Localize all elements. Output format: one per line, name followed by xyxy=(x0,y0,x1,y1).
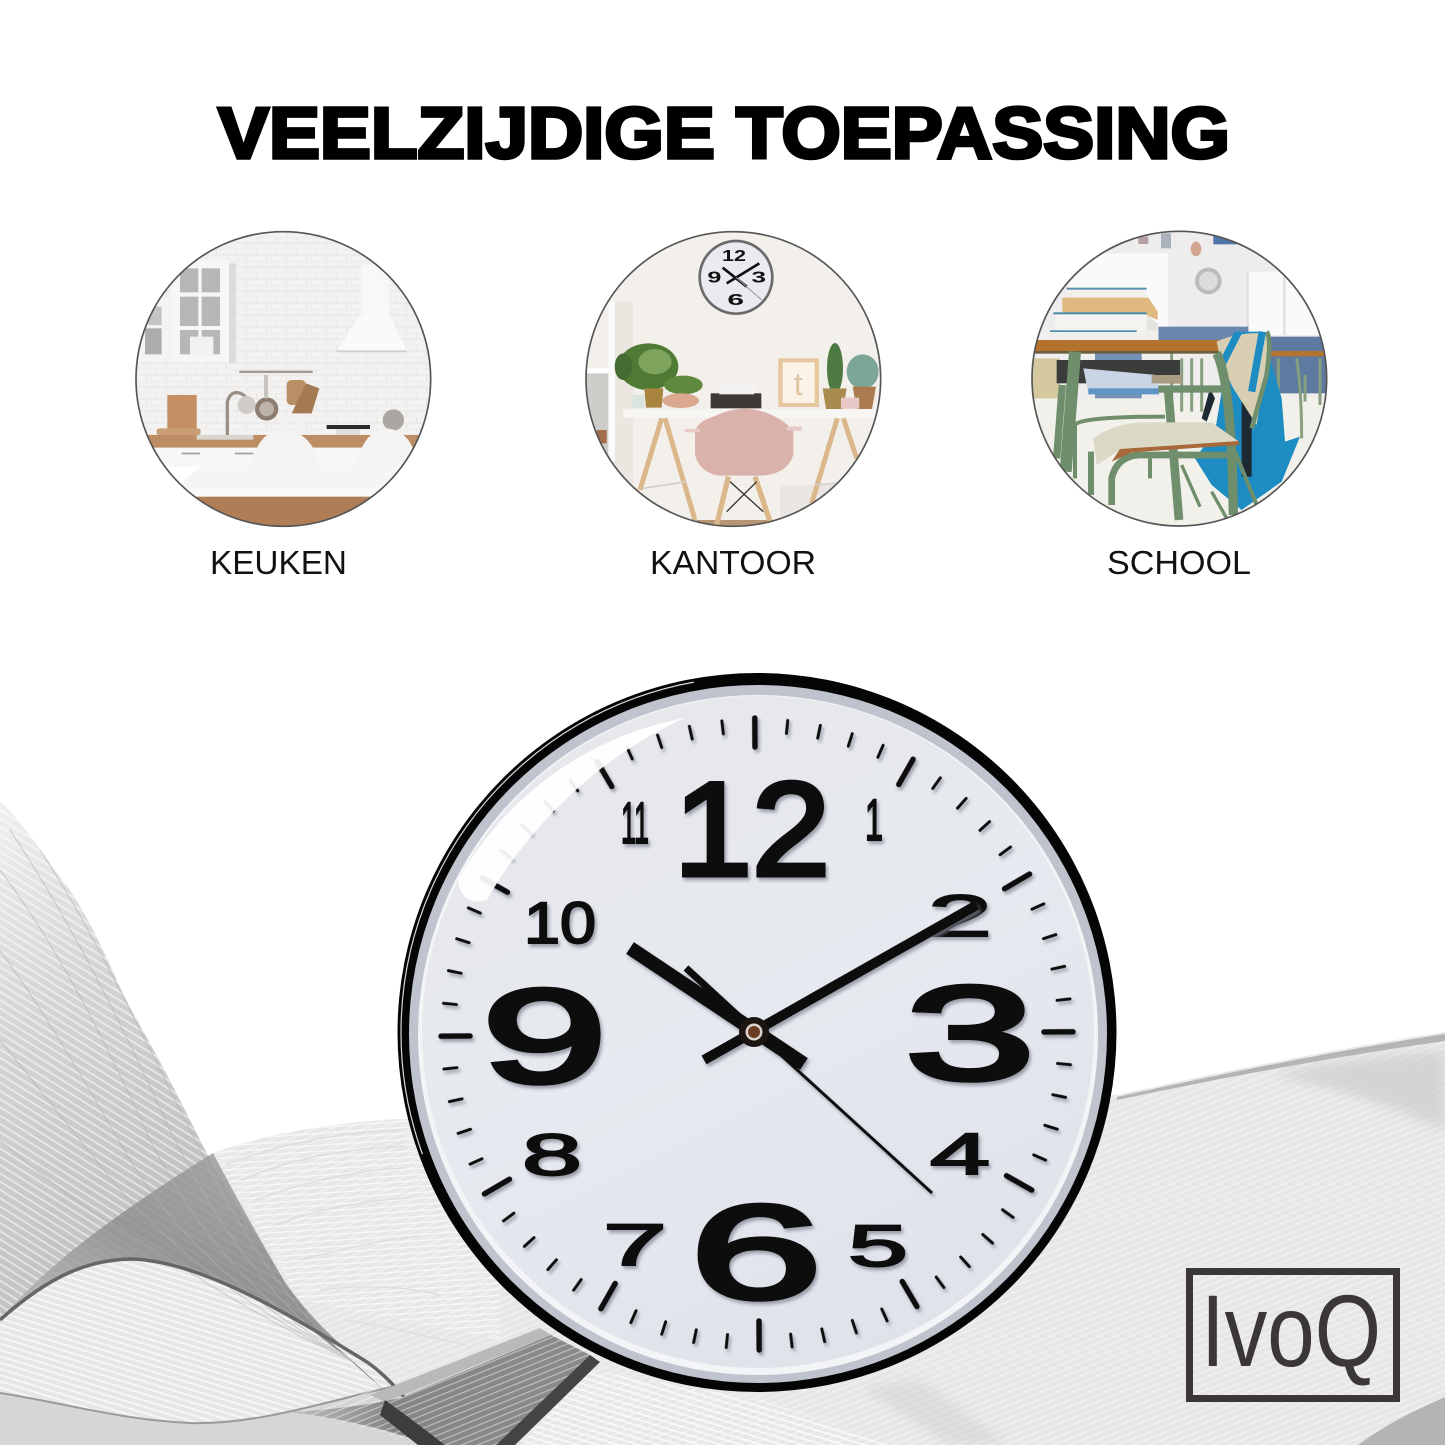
wave: sail edge lines xyxy=(0,830,350,1360)
clock glass glare xyxy=(458,718,685,902)
clock numerals: 7 xyxy=(603,1213,667,1278)
second hand xyxy=(686,968,932,1193)
photo: office: 12 xyxy=(722,248,746,265)
clock numerals: 5 xyxy=(848,1214,908,1279)
plants xyxy=(618,343,678,390)
wave: lower left sheet xyxy=(0,1259,440,1445)
legs xyxy=(1057,352,1257,520)
wave: left sail xyxy=(0,801,425,1435)
background furniture xyxy=(1170,354,1322,438)
clock hub xyxy=(739,1017,769,1047)
books xyxy=(1068,290,1152,302)
mini clock xyxy=(1195,268,1222,294)
clock numerals: 6 xyxy=(690,1179,822,1327)
panel: kantoor xyxy=(580,225,890,581)
clock xyxy=(301,576,1213,1445)
wave: dark ribbon at bottom xyxy=(290,1335,590,1445)
label: keuken: KEUKEN xyxy=(210,544,347,581)
label: kantoor: KANTOOR xyxy=(650,544,816,581)
desk top xyxy=(1036,340,1220,351)
hour hand xyxy=(630,948,804,1064)
wave: dark overlap wedge xyxy=(0,1153,360,1360)
backpack xyxy=(1195,332,1300,510)
mini clock on wall xyxy=(698,240,774,315)
clock tick marks xyxy=(439,716,1075,1352)
clock numerals: 10 xyxy=(524,891,596,956)
wave: soft band under clock xyxy=(860,1380,1010,1445)
under desk xyxy=(1057,360,1180,383)
label: school: SCHOOL xyxy=(1107,544,1251,581)
photo: office: 9 xyxy=(707,269,721,286)
clock numerals: 3 xyxy=(905,960,1035,1108)
clock numerals: 8 xyxy=(522,1123,582,1188)
wave: bottom right corner xyxy=(1358,1397,1445,1445)
clock numerals: 2 xyxy=(928,884,992,949)
clock numerals: 4 xyxy=(930,1122,990,1187)
clock numerals: 12 xyxy=(674,756,830,904)
photo: office: 6 xyxy=(727,292,744,309)
photo: office xyxy=(580,225,890,535)
minute hand xyxy=(704,905,977,1060)
clock numerals xyxy=(482,756,1035,1327)
logo: IvoQ: IvoQ xyxy=(1201,1274,1381,1388)
clock numerals: 9 xyxy=(482,963,607,1111)
wave: bottom left strip xyxy=(0,1370,470,1445)
wave: fine lines on sheet xyxy=(225,1130,465,1345)
chair xyxy=(717,477,770,525)
background: flowing grey waves xyxy=(0,801,1445,1445)
panel: keuken xyxy=(130,225,440,581)
wave: dark crest line xyxy=(0,1259,440,1445)
title: VEELZIJDIGE TOEPASSING xyxy=(218,94,1230,174)
clock hands xyxy=(630,905,977,1193)
wave: horizontal sheet behind clock xyxy=(213,1032,1445,1445)
photo: kitchen xyxy=(130,225,440,535)
clock numerals: 1 xyxy=(865,788,883,853)
desk xyxy=(624,410,634,418)
clock numerals: 11 xyxy=(621,791,649,856)
wave: top edge shadow on the right xyxy=(1117,1034,1445,1100)
panel: school xyxy=(1025,225,1335,581)
photo: office: t xyxy=(794,366,803,402)
clock case xyxy=(301,576,1213,1445)
chair seat xyxy=(1093,422,1239,465)
photo: classroom xyxy=(1025,225,1335,535)
photo: office: 3 xyxy=(751,269,766,286)
